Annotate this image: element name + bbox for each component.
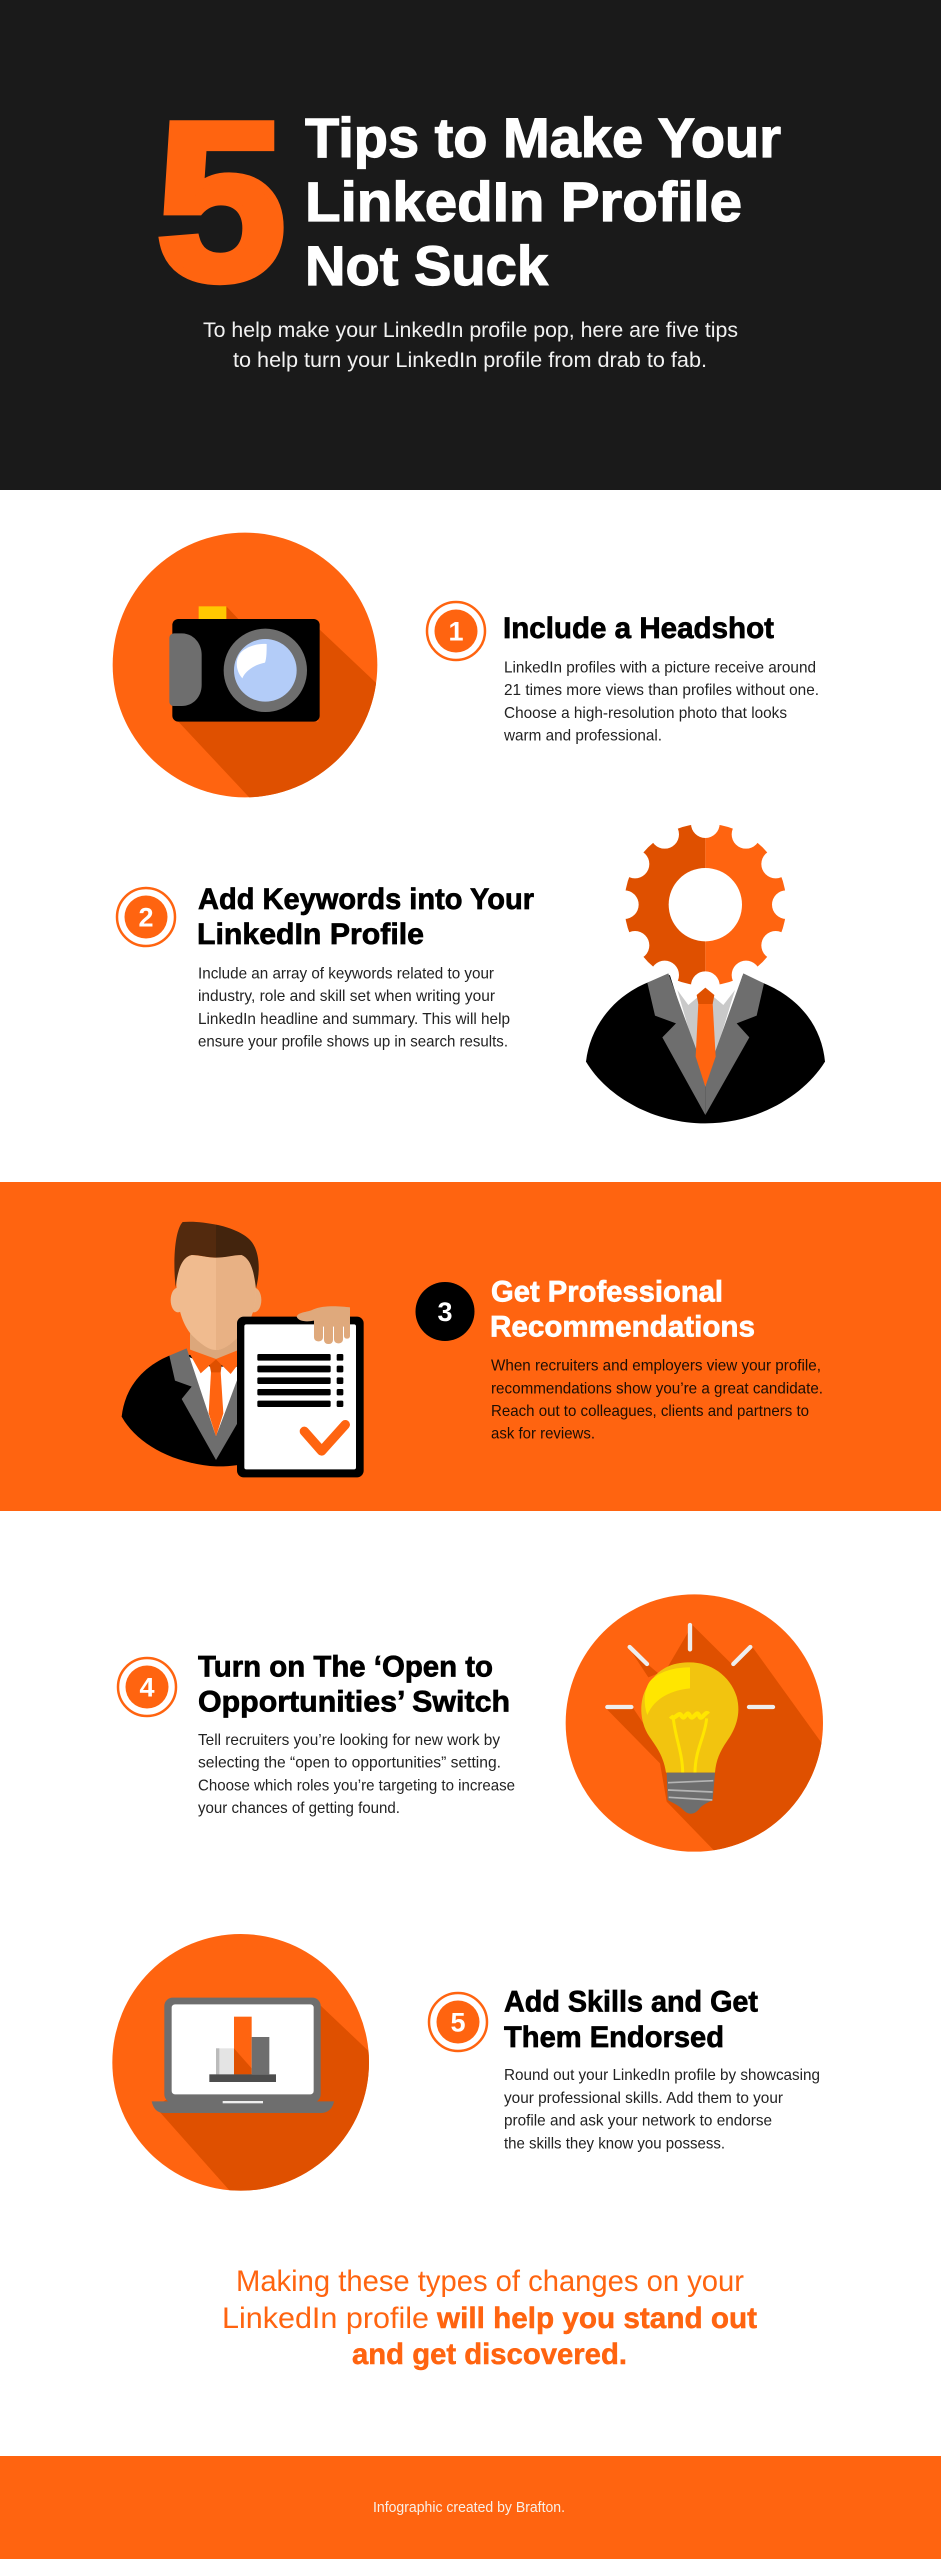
body 3 [491, 1358, 823, 1443]
body 1: warm and professional. [503, 728, 662, 745]
heading 2 [197, 883, 534, 951]
badge 3: 3 [437, 1297, 453, 1327]
heading 5 [504, 1986, 758, 2054]
body 4: your chances of getting found. [198, 1800, 400, 1817]
badge 5: 5 [450, 2008, 466, 2038]
subtitle: to help turn your LinkedIn profile from drab to fab. [233, 349, 707, 372]
body 3: ask for reviews. [491, 1426, 595, 1443]
closing statement: Making these types of changes on your [236, 2265, 744, 2298]
icon: camera in orange circle [113, 533, 380, 800]
closing statement: LinkedIn profile [222, 2302, 429, 2335]
body 5: the skills they know you possess. [504, 2135, 725, 2152]
body 2: Include an array of keywords related to your [198, 966, 495, 982]
body 3: recommendations show you’re a great candidate. [491, 1380, 823, 1397]
badge 1: 1 [448, 616, 464, 646]
closing statement [222, 2265, 757, 2371]
badge 2 [117, 888, 175, 946]
heading 5: Add Skills and Get [504, 1986, 758, 2018]
badge 3 [416, 1282, 474, 1341]
badge 1 [427, 602, 485, 660]
big orange number 5: 5 [156, 75, 286, 327]
footer credit: Infographic created by Brafton. [373, 2499, 565, 2516]
body 2 [198, 966, 510, 1051]
heading 4: Opportunities’ Switch [198, 1686, 510, 1719]
tip 4 [118, 1651, 515, 1817]
body 2: LinkedIn headline and summary. This will help [198, 1011, 510, 1028]
body 5: profile and ask your network to endorse [504, 2113, 772, 2130]
subtitle: To help make your LinkedIn profile pop, here are five tips [203, 319, 738, 342]
body 3: Reach out to colleagues, clients and partners to [491, 1403, 809, 1420]
heading 3: Get Professional [491, 1276, 723, 1309]
body 5: Round out your LinkedIn profile by showcasing [504, 2067, 820, 2084]
clipboard [237, 1317, 364, 1477]
icon: business suit with gear head [586, 824, 825, 1123]
badge 5 [429, 1993, 487, 2051]
icon: light bulb in orange circle [566, 1594, 827, 1857]
body 5: your professional skills. Add them to your [504, 2090, 784, 2107]
title [305, 106, 781, 297]
icon: laptop with chart in orange circle [112, 1934, 372, 2197]
tip 2 [117, 883, 534, 1051]
gear head [624, 824, 786, 986]
heading 2: Add Keywords into Your [198, 883, 534, 916]
bar chart [209, 2017, 276, 2082]
body 2: ensure your profile shows up in search results. [198, 1034, 508, 1051]
heading 4: Turn on The ‘Open to [198, 1651, 493, 1684]
panel: orange band tip 3 [0, 1182, 941, 1511]
body 1 [503, 660, 819, 745]
heading 2: LinkedIn Profile [197, 918, 424, 951]
badge 4: 4 [139, 1672, 155, 1702]
closing statement: will help you stand out [436, 2302, 757, 2335]
icon: man holding checklist [122, 1222, 364, 1477]
heading 3: Recommendations [490, 1311, 755, 1344]
tip 1 [427, 602, 819, 745]
body 1: 21 times more views than profiles without one. [504, 682, 819, 699]
closing statement: and get discovered. [352, 2338, 627, 2371]
hand [297, 1306, 350, 1344]
footer band [0, 2456, 941, 2559]
body 1: Choose a high-resolution photo that looks [504, 705, 787, 722]
header panel [0, 0, 941, 490]
body 4: Tell recruiters you’re looking for new work by [198, 1732, 500, 1749]
subtitle [203, 319, 738, 372]
title: LinkedIn Profile [305, 170, 742, 233]
badge 4 [118, 1658, 176, 1716]
body 1: LinkedIn profiles with a picture receive around [504, 660, 816, 676]
body 5 [504, 2067, 820, 2152]
badge 2: 2 [138, 902, 154, 932]
heading 5: Them Endorsed [504, 2021, 724, 2054]
body 4: Choose which roles you’re targeting to increase [198, 1777, 515, 1794]
title: Not Suck [305, 234, 549, 297]
heading 1: Include a Headshot [503, 612, 774, 645]
body 4 [198, 1732, 515, 1817]
title: Tips to Make Your [305, 106, 781, 169]
heading 4 [198, 1651, 510, 1719]
tip 5 [429, 1986, 820, 2152]
body 2: industry, role and skill set when writing your [198, 988, 496, 1005]
body 3: When recruiters and employers view your profile, [491, 1358, 821, 1375]
heading 3 [490, 1276, 755, 1344]
body 4: selecting the “open to opportunities” setting. [198, 1755, 501, 1772]
